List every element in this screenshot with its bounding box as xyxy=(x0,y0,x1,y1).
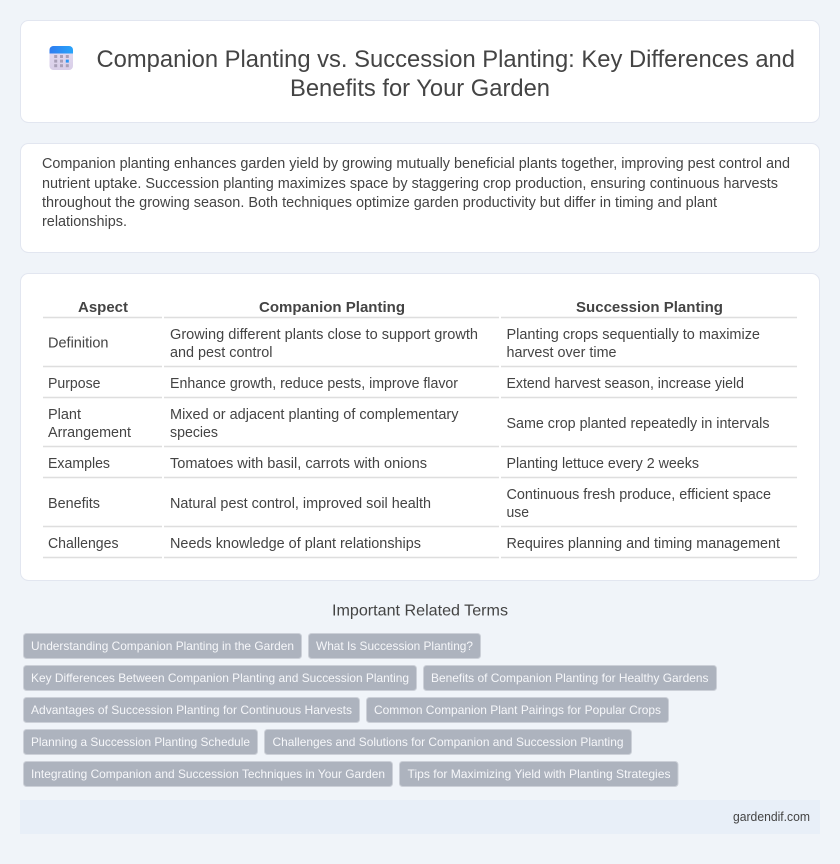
row: definition: and pest control xyxy=(170,345,272,361)
table header: Companion Planting xyxy=(259,299,405,316)
tag xyxy=(400,762,678,786)
row: definition: Definition xyxy=(48,336,108,352)
row: definition: harvest over time xyxy=(506,345,616,361)
tag xyxy=(24,762,392,786)
row: plant arrangement: Mixed or adjacent planting of complementary xyxy=(170,407,459,423)
tag: What Is Succession Planting? xyxy=(316,639,473,653)
intro text: Companion planting enhances garden yield by growing mutually beneficial plants together, improving pest control and xyxy=(42,156,790,172)
tag: Common Companion Plant Pairings for Popular Crops xyxy=(374,703,661,717)
row: purpose xyxy=(48,376,744,392)
tag: Tips for Maximizing Yield with Planting Strategies xyxy=(408,767,670,781)
table header: Succession Planting xyxy=(576,299,723,316)
row: definition: Planting crops sequentially to maximize xyxy=(506,327,760,343)
icon: calendar xyxy=(50,46,73,70)
tag: Key Differences Between Companion Planting and Succession Planting xyxy=(31,671,409,685)
panel: introduction xyxy=(20,144,820,252)
intro text: relationships. xyxy=(42,214,127,230)
row: challenges: Challenges xyxy=(48,536,118,552)
heading: important related terms: Important Related Terms xyxy=(332,602,508,620)
intro text: throughout the growing season. Both techniques optimize garden productivity but differ in timing and plant xyxy=(42,195,717,211)
row: benefits: Continuous fresh produce, efficient space xyxy=(506,487,771,503)
row: benefits: Benefits xyxy=(48,496,100,512)
footer: gardendif.com xyxy=(733,810,810,824)
row: challenges: Needs knowledge of plant relationships xyxy=(170,536,421,552)
row: purpose: Enhance growth, reduce pests, improve flavor xyxy=(170,376,458,392)
row: purpose: Purpose xyxy=(48,376,100,392)
tag xyxy=(424,666,716,690)
row: definition xyxy=(48,327,760,361)
table header xyxy=(78,299,723,316)
row: purpose: Extend harvest season, increase yield xyxy=(506,376,744,392)
intro text xyxy=(42,156,790,230)
row: examples xyxy=(48,456,699,472)
tag: Advantages of Succession Planting for Continuous Harvests xyxy=(31,703,352,717)
row: definition: Growing different plants close to support growth xyxy=(170,327,478,343)
row: benefits: Natural pest control, improved soil health xyxy=(170,496,431,512)
tag: Planning a Succession Planting Schedule xyxy=(31,735,250,749)
row: plant arrangement: species xyxy=(170,425,218,441)
tag xyxy=(24,634,302,658)
panel: header xyxy=(20,20,820,122)
tag xyxy=(366,698,668,722)
tag: Challenges and Solutions for Companion and Succession Planting xyxy=(272,735,624,749)
tag: Benefits of Companion Planting for Healthy Gardens xyxy=(431,671,708,685)
title: Companion Planting vs. Succession Planting: Key Differences and xyxy=(96,46,795,73)
row: plant arrangement: Same crop planted repeatedly in intervals xyxy=(506,416,770,432)
tag: Integrating Companion and Succession Techniques in Your Garden xyxy=(31,767,385,781)
row: challenges: Requires planning and timing management xyxy=(506,536,780,552)
tag xyxy=(24,730,258,754)
title xyxy=(96,46,795,102)
title: Benefits for Your Garden xyxy=(290,75,550,102)
row: examples: Planting lettuce every 2 weeks xyxy=(506,456,699,472)
footer xyxy=(20,800,820,834)
row: examples: Tomatoes with basil, carrots with onions xyxy=(170,456,427,472)
panel: comparison table xyxy=(20,274,820,580)
tag: Understanding Companion Planting in the Garden xyxy=(31,639,294,653)
tag xyxy=(24,698,360,722)
intro text: nutrient uptake. Succession planting maximizes space by staggering crop production, ensuring continuous harvests xyxy=(42,176,778,192)
tag xyxy=(24,666,416,690)
row: benefits: use xyxy=(506,505,529,521)
row: benefits xyxy=(48,487,771,521)
row: plant arrangement xyxy=(48,407,770,441)
row: plant arrangement: Plant xyxy=(48,407,81,423)
row: challenges xyxy=(48,536,780,552)
tag xyxy=(308,634,480,658)
table header: Aspect xyxy=(78,299,128,316)
tag xyxy=(264,730,632,754)
row: plant arrangement: Arrangement xyxy=(48,425,131,441)
row: examples: Examples xyxy=(48,456,110,472)
related terms tags xyxy=(24,634,716,786)
